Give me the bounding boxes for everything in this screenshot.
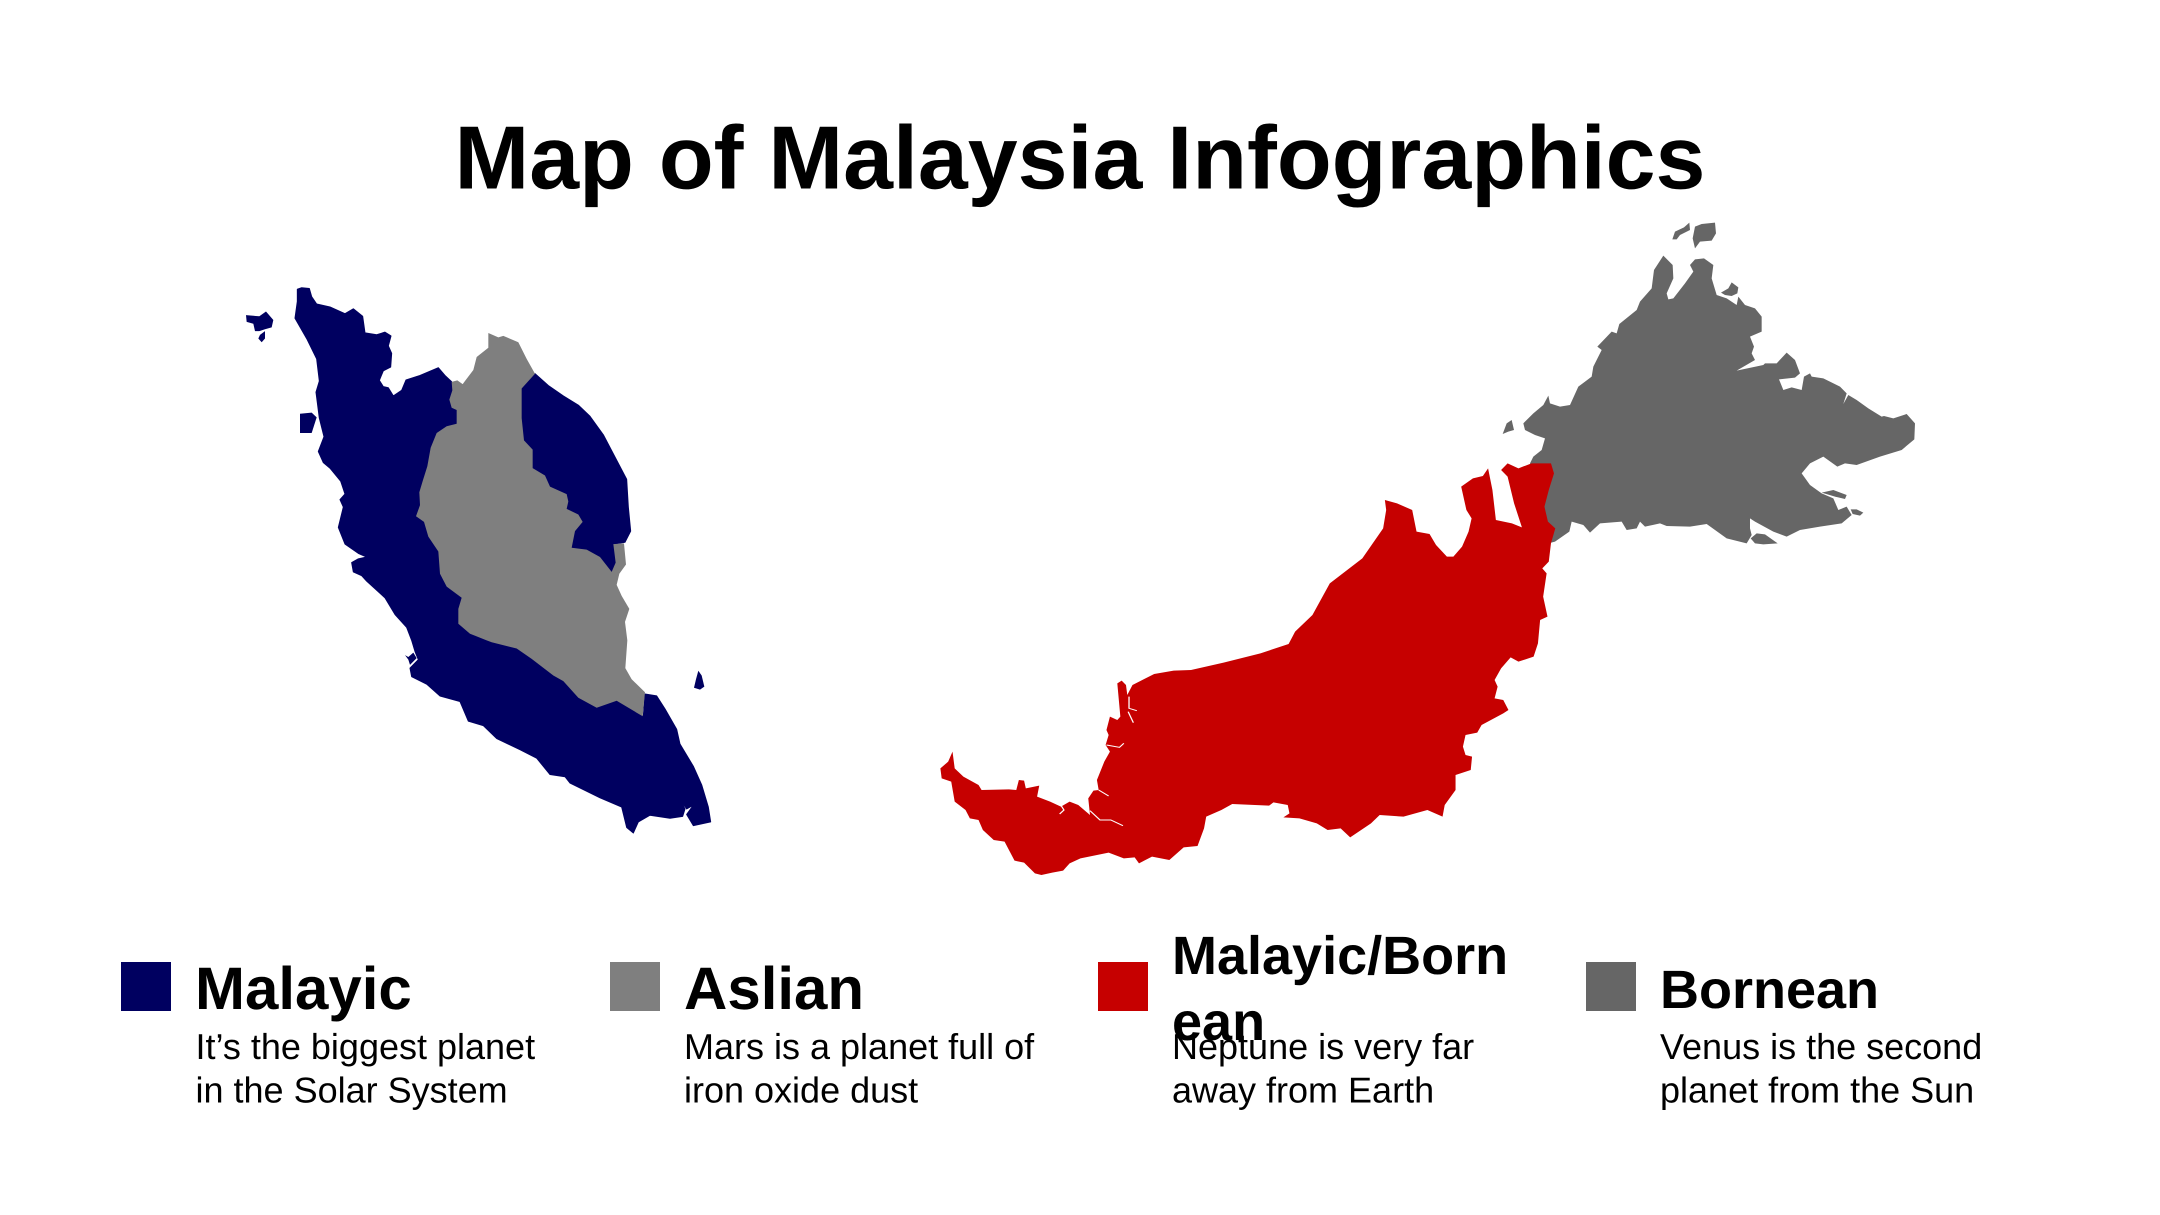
heading: Malayic/Bornean wrapped: ean bbox=[1172, 992, 1265, 1052]
description: Malayic: in the Solar System bbox=[196, 1070, 508, 1110]
swatch: red bbox=[1098, 962, 1148, 1011]
description: Bornean: planet from the Sun bbox=[1660, 1070, 1974, 1110]
swatch: navy bbox=[121, 962, 171, 1011]
description: Aslian: Mars is a planet full of bbox=[684, 1026, 1035, 1067]
heading: Malayic/Bornean wrapped: Malayic/Born bbox=[1172, 926, 1508, 986]
description: Bornean: Venus is the second bbox=[1660, 1026, 1982, 1067]
description: Malayic/Bornean: away from Earth bbox=[1172, 1070, 1434, 1110]
map: peninsular Malaysia bbox=[246, 288, 711, 833]
description: Malayic/Bornean: Neptune is very far bbox=[1172, 1026, 1474, 1067]
legend item: Malayic/Bornean bbox=[1098, 926, 1508, 1110]
region: east peninsula, Malayic bbox=[522, 374, 631, 572]
description: Malayic: It’s the biggest planet bbox=[196, 1026, 535, 1067]
heading: Bornean: Bornean bbox=[1660, 960, 1879, 1020]
region: west peninsula, Malayic bbox=[295, 288, 711, 833]
legend item: Malayic bbox=[121, 955, 535, 1110]
swatch: dark gray bbox=[1586, 962, 1636, 1011]
swatch: gray bbox=[610, 962, 660, 1011]
map: Sabah, Bornean bbox=[1503, 223, 1915, 544]
heading: Aslian: Aslian bbox=[684, 955, 864, 1022]
legend item: Aslian bbox=[610, 955, 1035, 1110]
legend item: Bornean bbox=[1586, 960, 1982, 1110]
islands: Malayic bbox=[246, 311, 704, 690]
heading: Malayic: Malayic bbox=[195, 955, 412, 1022]
title: Map of Malaysia Infographics bbox=[455, 108, 1705, 208]
region: central peninsula, Aslian bbox=[416, 333, 645, 716]
description: Aslian: iron oxide dust bbox=[684, 1070, 918, 1110]
map: Sarawak, Malayic/Bornean bbox=[940, 463, 1555, 875]
